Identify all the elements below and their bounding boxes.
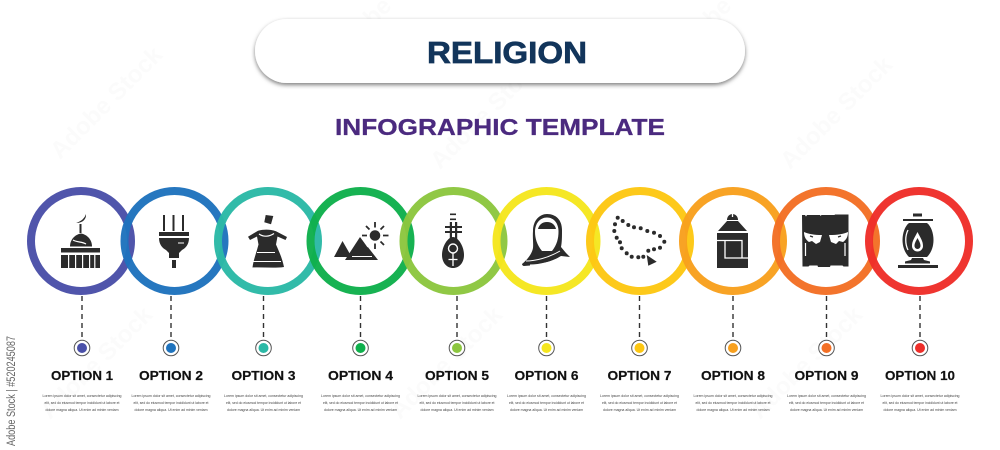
option 10 text: OPTION 10 bbox=[885, 368, 955, 383]
rings bbox=[31, 191, 969, 291]
icon: pyramids and sun bbox=[334, 222, 388, 260]
option 7 text: dolore magna aliqua. Ut enim ad minim veniam bbox=[603, 407, 676, 412]
option 3 text: dolore magna aliqua. Ut enim ad minim veniam bbox=[227, 407, 300, 412]
option 1 text bbox=[42, 368, 122, 412]
option 2 text: elit, sed do eiusmod tempor incididunt ut labore et bbox=[134, 400, 209, 405]
option 1 text: Lorem ipsum dolor sit amet, consectetur adipiscing bbox=[42, 393, 122, 398]
option 1 text: elit, sed do eiusmod tempor incididunt ut labore et bbox=[44, 400, 120, 405]
option 6 text: elit, sed do eiusmod tempor incididunt ut labore et bbox=[509, 400, 585, 405]
option 6 text bbox=[507, 368, 586, 412]
text: Adobe Stock bbox=[745, 301, 868, 424]
title pill bbox=[255, 19, 745, 83]
option 9 text: OPTION 9 bbox=[794, 368, 858, 383]
option 4 text: Lorem ipsum dolor sit amet, consectetur adipiscing bbox=[321, 393, 400, 398]
option 10 text: elit, sed do eiusmod tempor incididunt ut labore et bbox=[882, 400, 958, 405]
option 1 text: OPTION 1 bbox=[51, 368, 113, 383]
connector dashes bbox=[82, 296, 920, 338]
text: Adobe Stock bbox=[425, 51, 548, 174]
option 4 text: elit, sed do eiusmod tempor incididunt ut labore et bbox=[323, 400, 399, 405]
option 6 text: dolore magna aliqua. Ut enim ad minim veniam bbox=[510, 407, 583, 412]
option 9 text bbox=[787, 368, 866, 412]
option 5 text: OPTION 5 bbox=[425, 368, 489, 383]
title: RELIGION bbox=[427, 35, 587, 70]
option 6 text: Lorem ipsum dolor sit amet, consectetur adipiscing bbox=[507, 393, 586, 398]
option 1 text: dolore magna aliqua. Ut enim ad minim veniam bbox=[46, 407, 118, 412]
option 3 text: OPTION 3 bbox=[232, 368, 296, 383]
option 5 text: elit, sed do eiusmod tempor incididunt ut labore et bbox=[420, 400, 495, 405]
option 7 text: elit, sed do eiusmod tempor incididunt ut labore et bbox=[602, 400, 678, 405]
option 8 text bbox=[694, 368, 772, 412]
icon: mosque bbox=[61, 214, 100, 268]
option 5 text bbox=[418, 368, 496, 412]
option 4 text bbox=[321, 368, 400, 412]
option 10 text: dolore magna aliqua. Ut enim ad minim veniam bbox=[884, 407, 956, 412]
option 2 text: dolore magna aliqua. Ut enim ad minim veniam bbox=[134, 407, 208, 412]
option 9 text: Lorem ipsum dolor sit amet, consectetur adipiscing bbox=[787, 393, 866, 398]
option 9 text: dolore magna aliqua. Ut enim ad minim veniam bbox=[790, 407, 863, 412]
icon: oud bbox=[442, 214, 464, 268]
text: Adobe Stock bbox=[385, 301, 508, 424]
option 2 text bbox=[132, 368, 210, 412]
option 7 text: Lorem ipsum dolor sit amet, consectetur adipiscing bbox=[600, 393, 679, 398]
option 5 text: Lorem ipsum dolor sit amet, consectetur adipiscing bbox=[418, 393, 496, 398]
option 2 text: Lorem ipsum dolor sit amet, consectetur adipiscing bbox=[132, 393, 210, 398]
stock id side text: Adobe Stock | #520245087 bbox=[6, 336, 18, 446]
option 8 text: elit, sed do eiusmod tempor incididunt ut labore et bbox=[696, 400, 771, 405]
icon: prayer beads bbox=[612, 216, 666, 266]
option 4 text: dolore magna aliqua. Ut enim ad minim veniam bbox=[324, 407, 397, 412]
option markers bbox=[74, 340, 928, 356]
option 3 text: Lorem ipsum dolor sit amet, consectetur adipiscing bbox=[224, 393, 303, 398]
option 10 text: Lorem ipsum dolor sit amet, consectetur adipiscing bbox=[880, 393, 960, 398]
option 2 text: OPTION 2 bbox=[139, 368, 203, 383]
option 10 text bbox=[880, 368, 960, 412]
icon: dancer bbox=[248, 215, 287, 268]
option 3 text: elit, sed do eiusmod tempor incididunt ut labore et bbox=[226, 400, 302, 405]
option 7 text bbox=[600, 368, 679, 412]
text: Adobe Stock bbox=[775, 51, 898, 174]
icon: plug bbox=[159, 215, 189, 268]
option 3 text bbox=[224, 368, 303, 412]
text: Adobe Stock bbox=[45, 41, 168, 164]
option 6 text: OPTION 6 bbox=[514, 368, 578, 383]
option 7 text: OPTION 7 bbox=[608, 368, 672, 383]
option 8 text: dolore magna aliqua. Ut enim ad minim veniam bbox=[696, 407, 770, 412]
option 4 text: OPTION 4 bbox=[328, 368, 394, 383]
icon: masks on cloth bbox=[802, 214, 848, 267]
icon: kaaba lantern bbox=[717, 214, 748, 268]
text: Adobe Stock bbox=[35, 301, 158, 424]
option 8 text: Lorem ipsum dolor sit amet, consectetur adipiscing bbox=[694, 393, 772, 398]
icon: oil lamp bbox=[898, 214, 938, 268]
option 9 text: elit, sed do eiusmod tempor incididunt ut labore et bbox=[789, 400, 865, 405]
icon: hijab bbox=[522, 214, 570, 266]
option 8 text: OPTION 8 bbox=[701, 368, 765, 383]
option 5 text: dolore magna aliqua. Ut enim ad minim veniam bbox=[420, 407, 494, 412]
subtitle: INFOGRAPHIC TEMPLATE bbox=[335, 114, 665, 140]
